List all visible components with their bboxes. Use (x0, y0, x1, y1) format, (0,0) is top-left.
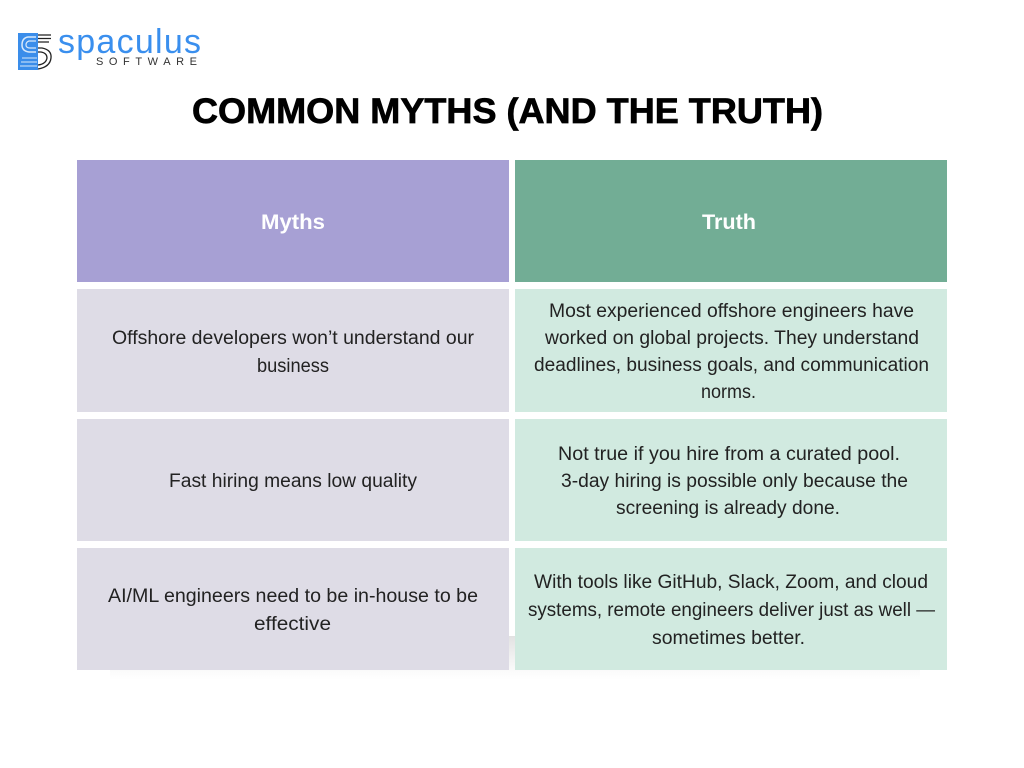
panel: myth 1 (77, 289, 509, 412)
truth 3 text: sometimes better. (652, 628, 805, 649)
myth 1 text: Offshore developers won’t understand our (112, 328, 475, 349)
truth 1 text (534, 301, 929, 403)
truth 3 text: systems, remote engineers deliver just as well — (528, 600, 935, 621)
panel: truth 2 (515, 419, 947, 541)
myth 3 text: AI/ML engineers need to be in-house to be (108, 586, 478, 607)
truth 3 text (528, 572, 935, 649)
panel: truth 3 (515, 548, 947, 670)
truth 1 text: worked on global projects. They understand (544, 328, 919, 349)
myth 2 text: Fast hiring means low quality (169, 471, 418, 492)
truth 2 text: Not true if you hire from a curated pool. (558, 444, 900, 465)
truth 3 text: With tools like GitHub, Slack, Zoom, and cloud (534, 572, 928, 593)
myth 3 text: effective (254, 614, 331, 635)
logo wordmark: spaculus (58, 23, 201, 61)
icon: blue and black S5 mark (18, 33, 51, 70)
logo: spaculus software (18, 23, 201, 70)
truth 1 text: norms. (701, 382, 756, 403)
truth 1 text: Most experienced offshore engineers have (549, 301, 914, 322)
panel: myths header (77, 160, 509, 282)
truth 2 text (558, 444, 908, 519)
heading: myths: Myths (261, 211, 325, 234)
title: COMMON MYTHS (AND THE TRUTH) (192, 92, 823, 131)
truth 1 text: deadlines, business goals, and communication (534, 355, 929, 376)
heading: truth: Truth (702, 211, 756, 234)
truth 2 text: screening is already done. (616, 498, 840, 519)
myth 3 text (108, 586, 478, 635)
panel: truth 1 (515, 289, 947, 412)
panel: myth 2 (77, 419, 509, 541)
panel: truth header (515, 160, 947, 282)
logo tagline: SOFTWARE (96, 56, 197, 68)
panel: myth 3 (77, 548, 509, 670)
myth 1 text (112, 328, 475, 377)
myth 1 text: business (257, 356, 329, 377)
truth 2 text: 3-day hiring is possible only because the (561, 471, 908, 492)
